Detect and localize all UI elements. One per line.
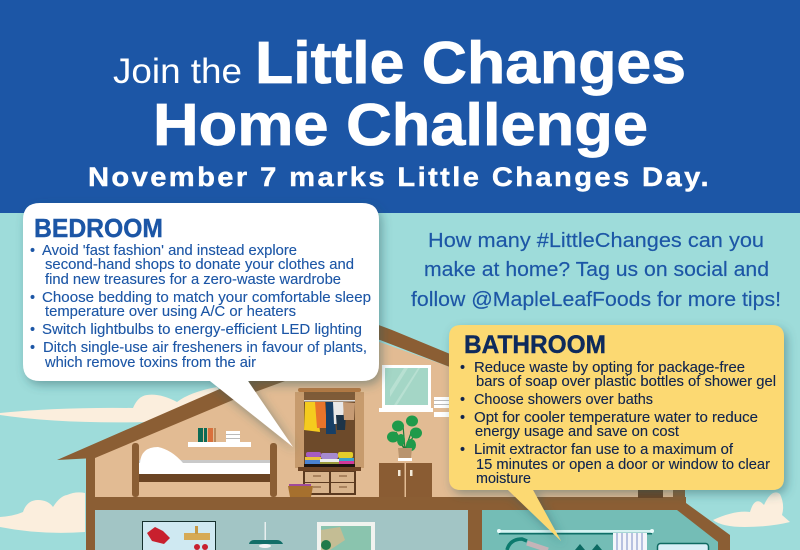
folded stacks [305, 452, 354, 464]
bedroom tips: Ditch single-use air fresheners in favour of plants, [43, 340, 367, 356]
panel: bedroom speech bubble [23, 203, 379, 447]
bed [132, 443, 277, 497]
bedroom tips: temperature over using A/C or heaters [45, 304, 296, 320]
bathroom tips: energy usage and save on cost [475, 424, 679, 440]
title line 2: Home Challenge [153, 92, 648, 158]
bedroom tips: Choose bedding to match your comfortable sleep [42, 290, 371, 306]
wall shelf with books [188, 428, 251, 447]
bedroom tips: • [30, 340, 35, 356]
bathroom tips: • [460, 392, 465, 408]
bedroom tips: which remove toxins from the air [44, 355, 256, 371]
bathroom tips: Limit extractor fan use to a maximum of [474, 442, 734, 458]
second shelf [434, 397, 450, 417]
title banner [0, 0, 800, 213]
subtitle: November 7 marks Little Changes Day. [88, 162, 711, 192]
heading: bedroom: BEDROOM [34, 213, 163, 243]
bathroom tips: Reduce waste by opting for package-free [474, 360, 745, 376]
framed picture [317, 522, 375, 550]
bathroom shower rail [497, 529, 654, 534]
bedroom tips: • [30, 322, 35, 338]
pendant lamp [249, 522, 283, 548]
window [379, 365, 433, 412]
bedroom tips: second-hand shops to donate your clothes and [45, 257, 354, 273]
house [57, 318, 730, 550]
call to action text: follow @MapleLeafFoods for more tips! [411, 289, 781, 311]
panel: bathroom speech bubble [449, 325, 784, 541]
hanging clothes [304, 402, 355, 434]
bathroom tips [460, 360, 776, 487]
wardrobe [295, 388, 364, 495]
laundry basket [288, 484, 313, 497]
heading: bathroom: BATHROOM [464, 331, 606, 359]
bath faucet [507, 539, 602, 550]
bathroom tips: 15 minutes or open a door or window to clear [476, 457, 770, 473]
upper floor wall [95, 335, 685, 497]
bathroom tips: • [460, 360, 465, 376]
bathroom tips: Opt for cooler temperature water to reduce [474, 410, 758, 426]
bedroom tips: Avoid 'fast fashion' and instead explore [42, 243, 297, 259]
bedroom tips [30, 243, 371, 371]
bedroom tips: • [30, 243, 35, 259]
bathroom tips: Choose showers over baths [474, 392, 653, 408]
call to action text: How many #LittleChanges can you [428, 230, 764, 252]
call to action text: make at home? Tag us on social and [424, 259, 769, 281]
bathroom tips: • [460, 442, 465, 458]
framed map of Canada [142, 521, 216, 550]
call to action text [411, 230, 781, 311]
bathroom tips: • [460, 410, 465, 426]
bathroom counter [658, 544, 708, 550]
cabinet [379, 463, 432, 497]
roof [57, 318, 455, 460]
clouds [0, 387, 790, 533]
bathroom room [482, 510, 718, 550]
bedroom tips: • [30, 290, 35, 306]
radiator [613, 533, 647, 550]
floor beam and walls [86, 458, 730, 550]
title line 1: Little Changes [255, 30, 686, 96]
lower left room [95, 510, 468, 550]
title line 1: Join the [113, 52, 242, 91]
cabinet in bathroom level [638, 488, 663, 498]
bathroom tips: bars of soap over plastic bottles of shower gel [476, 374, 776, 390]
bedroom tips: find new treasures for a zero-waste wardrobe [45, 272, 341, 288]
bathroom tips: moisture [476, 471, 531, 487]
bedroom tips: Switch lightbulbs to energy-efficient LED lighting [42, 322, 362, 338]
plant [387, 416, 422, 461]
